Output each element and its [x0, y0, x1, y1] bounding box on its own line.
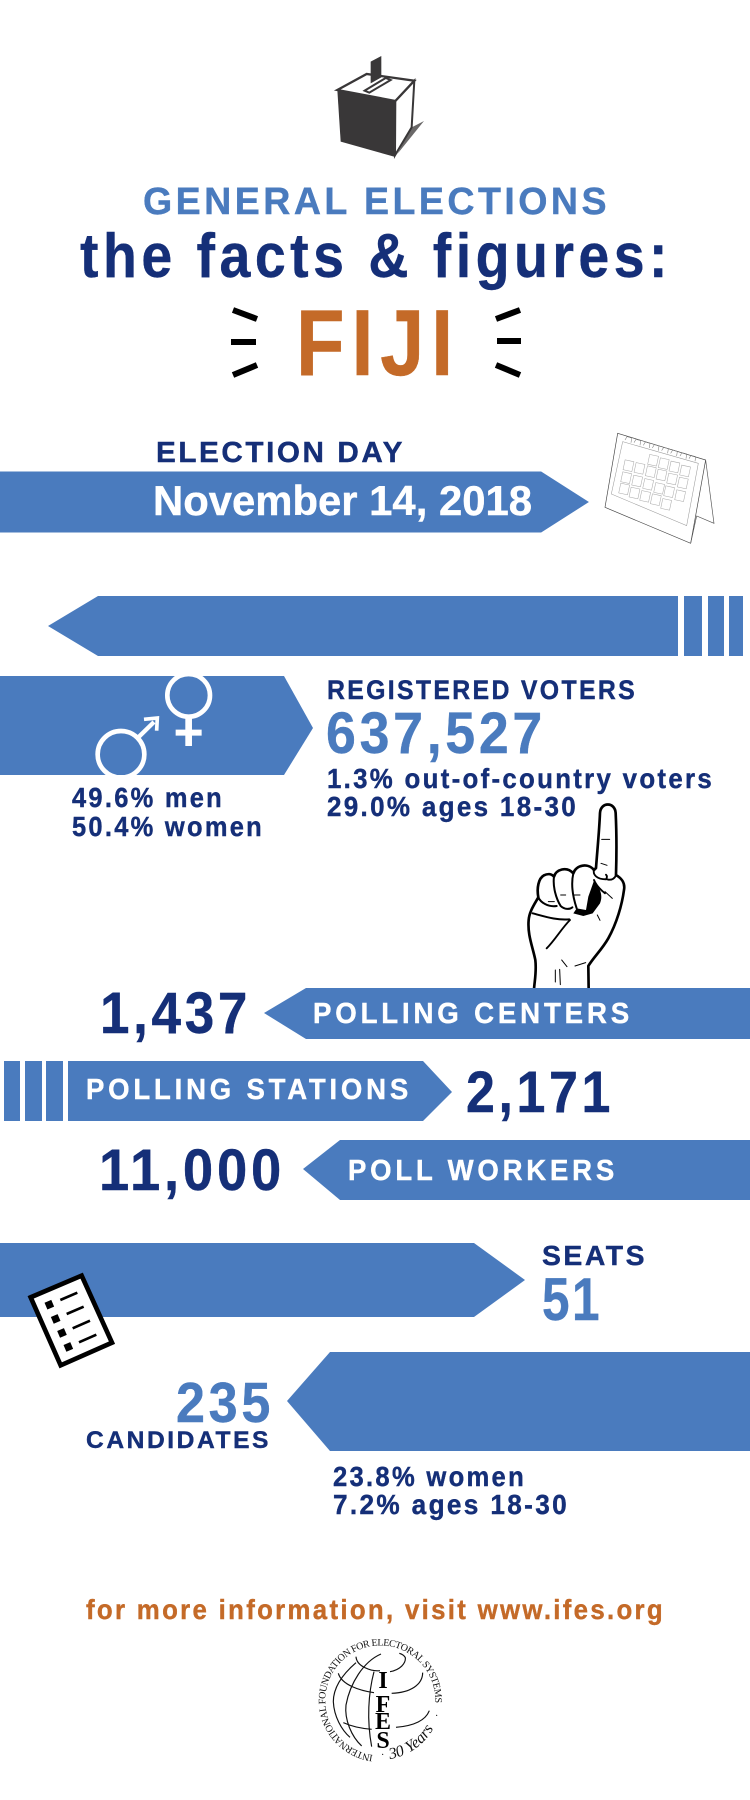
text: voter breakdown: [327, 763, 714, 822]
logo: IFES: S: [376, 1728, 390, 1754]
panel: registered voters: [0, 674, 714, 842]
logo: IFES: ·: [381, 1750, 384, 1761]
icon: emphasis ticks: [231, 310, 521, 375]
logo: IFES: INTERNATIONAL FOUNDATION FOR ELECTORAL SYSTEMS: [318, 1639, 442, 1762]
icon: ballot box: [337, 56, 424, 157]
arrow: candidates banner: [287, 1352, 750, 1451]
number: seats: 51: [542, 1266, 602, 1333]
panel: candidates: [86, 1352, 750, 1520]
icon: male symbol: [98, 718, 157, 778]
arrow: poll workers banner: [303, 1140, 750, 1200]
arrow: election date banner: [0, 472, 588, 532]
label: seats: SEATS: [542, 1240, 647, 1271]
icon: female symbol: [167, 674, 210, 746]
text: gender split: 50.4% women: [72, 811, 264, 842]
panel: seats: [0, 1240, 647, 1365]
logo: IFES: E: [375, 1709, 391, 1735]
number: polling centers: 1,437: [100, 981, 251, 1046]
icon: desk calendar: [605, 433, 714, 543]
text: candidate breakdown: [333, 1461, 569, 1520]
date: November 14, 2018: [153, 477, 532, 524]
label: polling stations: POLLING STATIONS: [86, 1074, 412, 1106]
logo: IFES: ·: [435, 1711, 438, 1722]
label: candidates: CANDIDATES: [86, 1427, 271, 1454]
label: polling centers: POLLING CENTERS: [313, 998, 633, 1030]
text: gender split: 49.6% men: [72, 782, 224, 813]
text: voter breakdown: 1.3% out-of-country voters: [327, 763, 714, 794]
panel: polling stations: [4, 1060, 614, 1125]
heading: general elections: GENERAL ELECTIONS: [143, 181, 610, 223]
panel: election day: [0, 433, 714, 543]
icon: checklist: [31, 1276, 112, 1365]
label: election day: ELECTION DAY: [156, 437, 405, 469]
number: poll workers: 11,000: [99, 1138, 285, 1203]
logo: IFES: I: [378, 1668, 388, 1694]
arrow: polling stations banner: [4, 1061, 452, 1121]
text: gender split: [72, 782, 264, 842]
label: registered voters: REGISTERED VOTERS: [327, 675, 637, 705]
label: poll workers: POLL WORKERS: [348, 1155, 618, 1187]
panel: polling centers: [100, 981, 750, 1046]
text: voter breakdown: 29.0% ages 18-30: [327, 791, 578, 822]
panel: poll workers: [99, 1138, 750, 1203]
heading: the facts and figures: the facts & figures:: [80, 222, 672, 291]
heading: Fiji: FIJI: [296, 290, 460, 395]
arrow: polling centers banner: [264, 988, 750, 1039]
number: candidates: 235: [176, 1371, 274, 1435]
arrow: pencil banner: [48, 596, 743, 656]
arrow: seats banner: [0, 1243, 525, 1317]
text: candidate breakdown: 7.2% ages 18-30: [333, 1489, 569, 1520]
text: candidate breakdown: 23.8% women: [333, 1461, 526, 1492]
arrow: gender banner: [0, 676, 313, 775]
icon: raised hand: [528, 805, 624, 989]
title: [80, 181, 672, 395]
logo: IFES: 30 Years: [390, 1725, 432, 1759]
logo: IFES: F: [376, 1692, 390, 1718]
footer link: for more information, visit www.ifes.org: [86, 1594, 665, 1625]
number: polling stations: 2,171: [466, 1060, 614, 1125]
number: registered voters: 637,527: [326, 701, 546, 766]
